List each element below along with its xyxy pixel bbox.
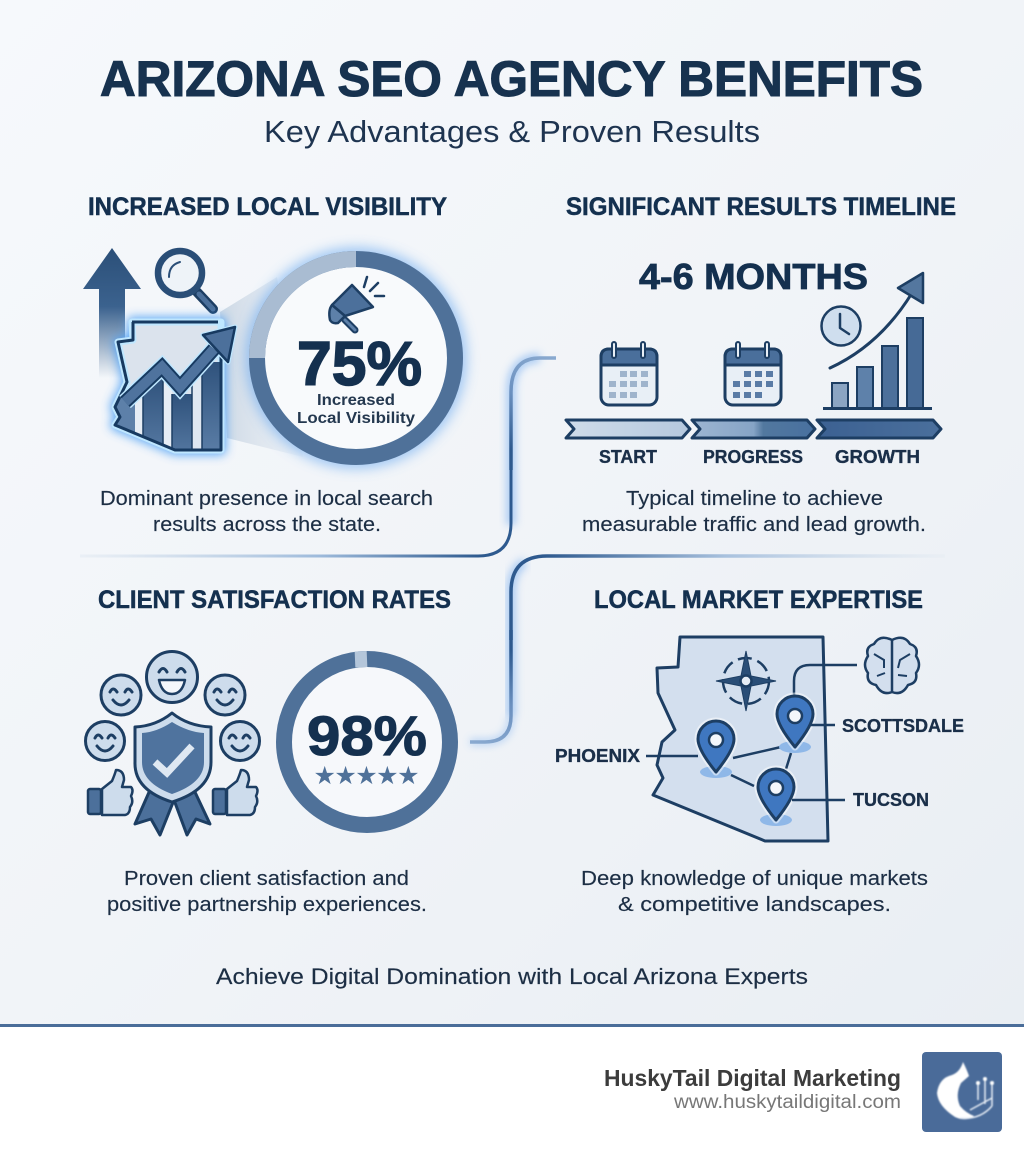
pin: scottsdale	[777, 696, 813, 753]
heading: increased local visibility: INCREASED LOCAL VISIBILITY	[88, 193, 447, 221]
donut chart: 75 percent	[253, 255, 459, 461]
icon: arizona growth chart	[112, 322, 235, 464]
tagline: Achieve Digital Domination with Local Arizona Experts	[216, 964, 808, 989]
label: start: START	[599, 447, 657, 467]
icon: start calendar	[601, 344, 657, 405]
icon: shield with check	[135, 713, 211, 802]
panel: increased local visibility	[83, 193, 459, 536]
dividers and connectors	[80, 216, 945, 915]
rating stars: ★★★★★	[314, 762, 420, 790]
label: tucson: TUCSON	[853, 790, 929, 810]
stat: 98%: 98%	[307, 704, 427, 767]
description: local visibility	[100, 488, 433, 536]
description: local visibility: results across the state.	[153, 514, 381, 536]
subtitle: Key Advantages & Proven Results	[264, 115, 760, 149]
icon: smiley group	[86, 652, 260, 760]
description: timeline	[582, 488, 926, 536]
label: scottsdale: SCOTTSDALE	[842, 716, 964, 736]
timeline chevrons	[566, 420, 941, 438]
website url: www.huskytaildigital.com	[673, 1092, 901, 1113]
description: local visibility: Dominant presence in local search	[100, 488, 433, 510]
brand name: HuskyTail Digital Marketing	[604, 1065, 901, 1091]
pin: tucson	[758, 769, 794, 826]
panel: results timeline	[566, 193, 956, 536]
description: market expertise: & competitive landscapes.	[618, 894, 891, 916]
label: growth: GROWTH	[835, 447, 920, 467]
stat caption second line: Local Visibility	[297, 410, 415, 427]
icon: right thumbs up	[213, 770, 258, 815]
logo	[922, 1052, 1002, 1132]
panel: client satisfaction	[86, 586, 451, 916]
label: phoenix: PHOENIX	[555, 746, 640, 766]
description: satisfaction	[107, 868, 427, 916]
arrow: growth curve	[830, 273, 923, 368]
route lines	[731, 747, 791, 786]
chart: growth bars	[823, 318, 932, 408]
description: timeline: measurable traffic and lead growth.	[582, 514, 926, 536]
description: timeline: Typical timeline to achieve	[626, 488, 883, 510]
label: progress: PROGRESS	[703, 447, 803, 467]
icon: left thumbs up	[88, 770, 132, 815]
heading: significant results timeline: SIGNIFICANT RESULTS TIMELINE	[566, 193, 956, 221]
heading: local market expertise: LOCAL MARKET EXPERTISE	[594, 586, 923, 614]
icon: progress calendar	[725, 344, 781, 405]
stat: 4-6 months: 4-6 MONTHS	[639, 256, 868, 297]
icon: clock	[822, 306, 860, 346]
icon: magnifying glass	[158, 251, 213, 309]
description: market expertise	[581, 868, 928, 916]
icon: up arrow	[83, 248, 141, 378]
icon: compass	[716, 651, 776, 711]
description: market expertise: Deep knowledge of unique markets	[581, 868, 928, 890]
pin: phoenix	[698, 721, 734, 778]
panel: local market expertise	[555, 586, 964, 916]
leader lines	[646, 725, 845, 800]
footer	[0, 1024, 1024, 1154]
icon: brain with connector	[794, 638, 919, 699]
description: satisfaction: positive partnership experiences.	[107, 894, 427, 916]
icon: megaphone	[329, 277, 384, 330]
connector funnel	[220, 277, 303, 457]
description: satisfaction: Proven client satisfaction and	[124, 868, 409, 890]
icon: ribbon	[135, 790, 210, 835]
donut chart: 98 percent	[284, 659, 450, 825]
title: ARIZONA SEO AGENCY BENEFITS	[100, 51, 923, 107]
stat caption: Increased	[317, 392, 395, 409]
map of arizona	[653, 637, 828, 841]
stat: 75%: 75%	[297, 330, 422, 399]
heading: client satisfaction rates: CLIENT SATISFACTION RATES	[98, 586, 451, 614]
